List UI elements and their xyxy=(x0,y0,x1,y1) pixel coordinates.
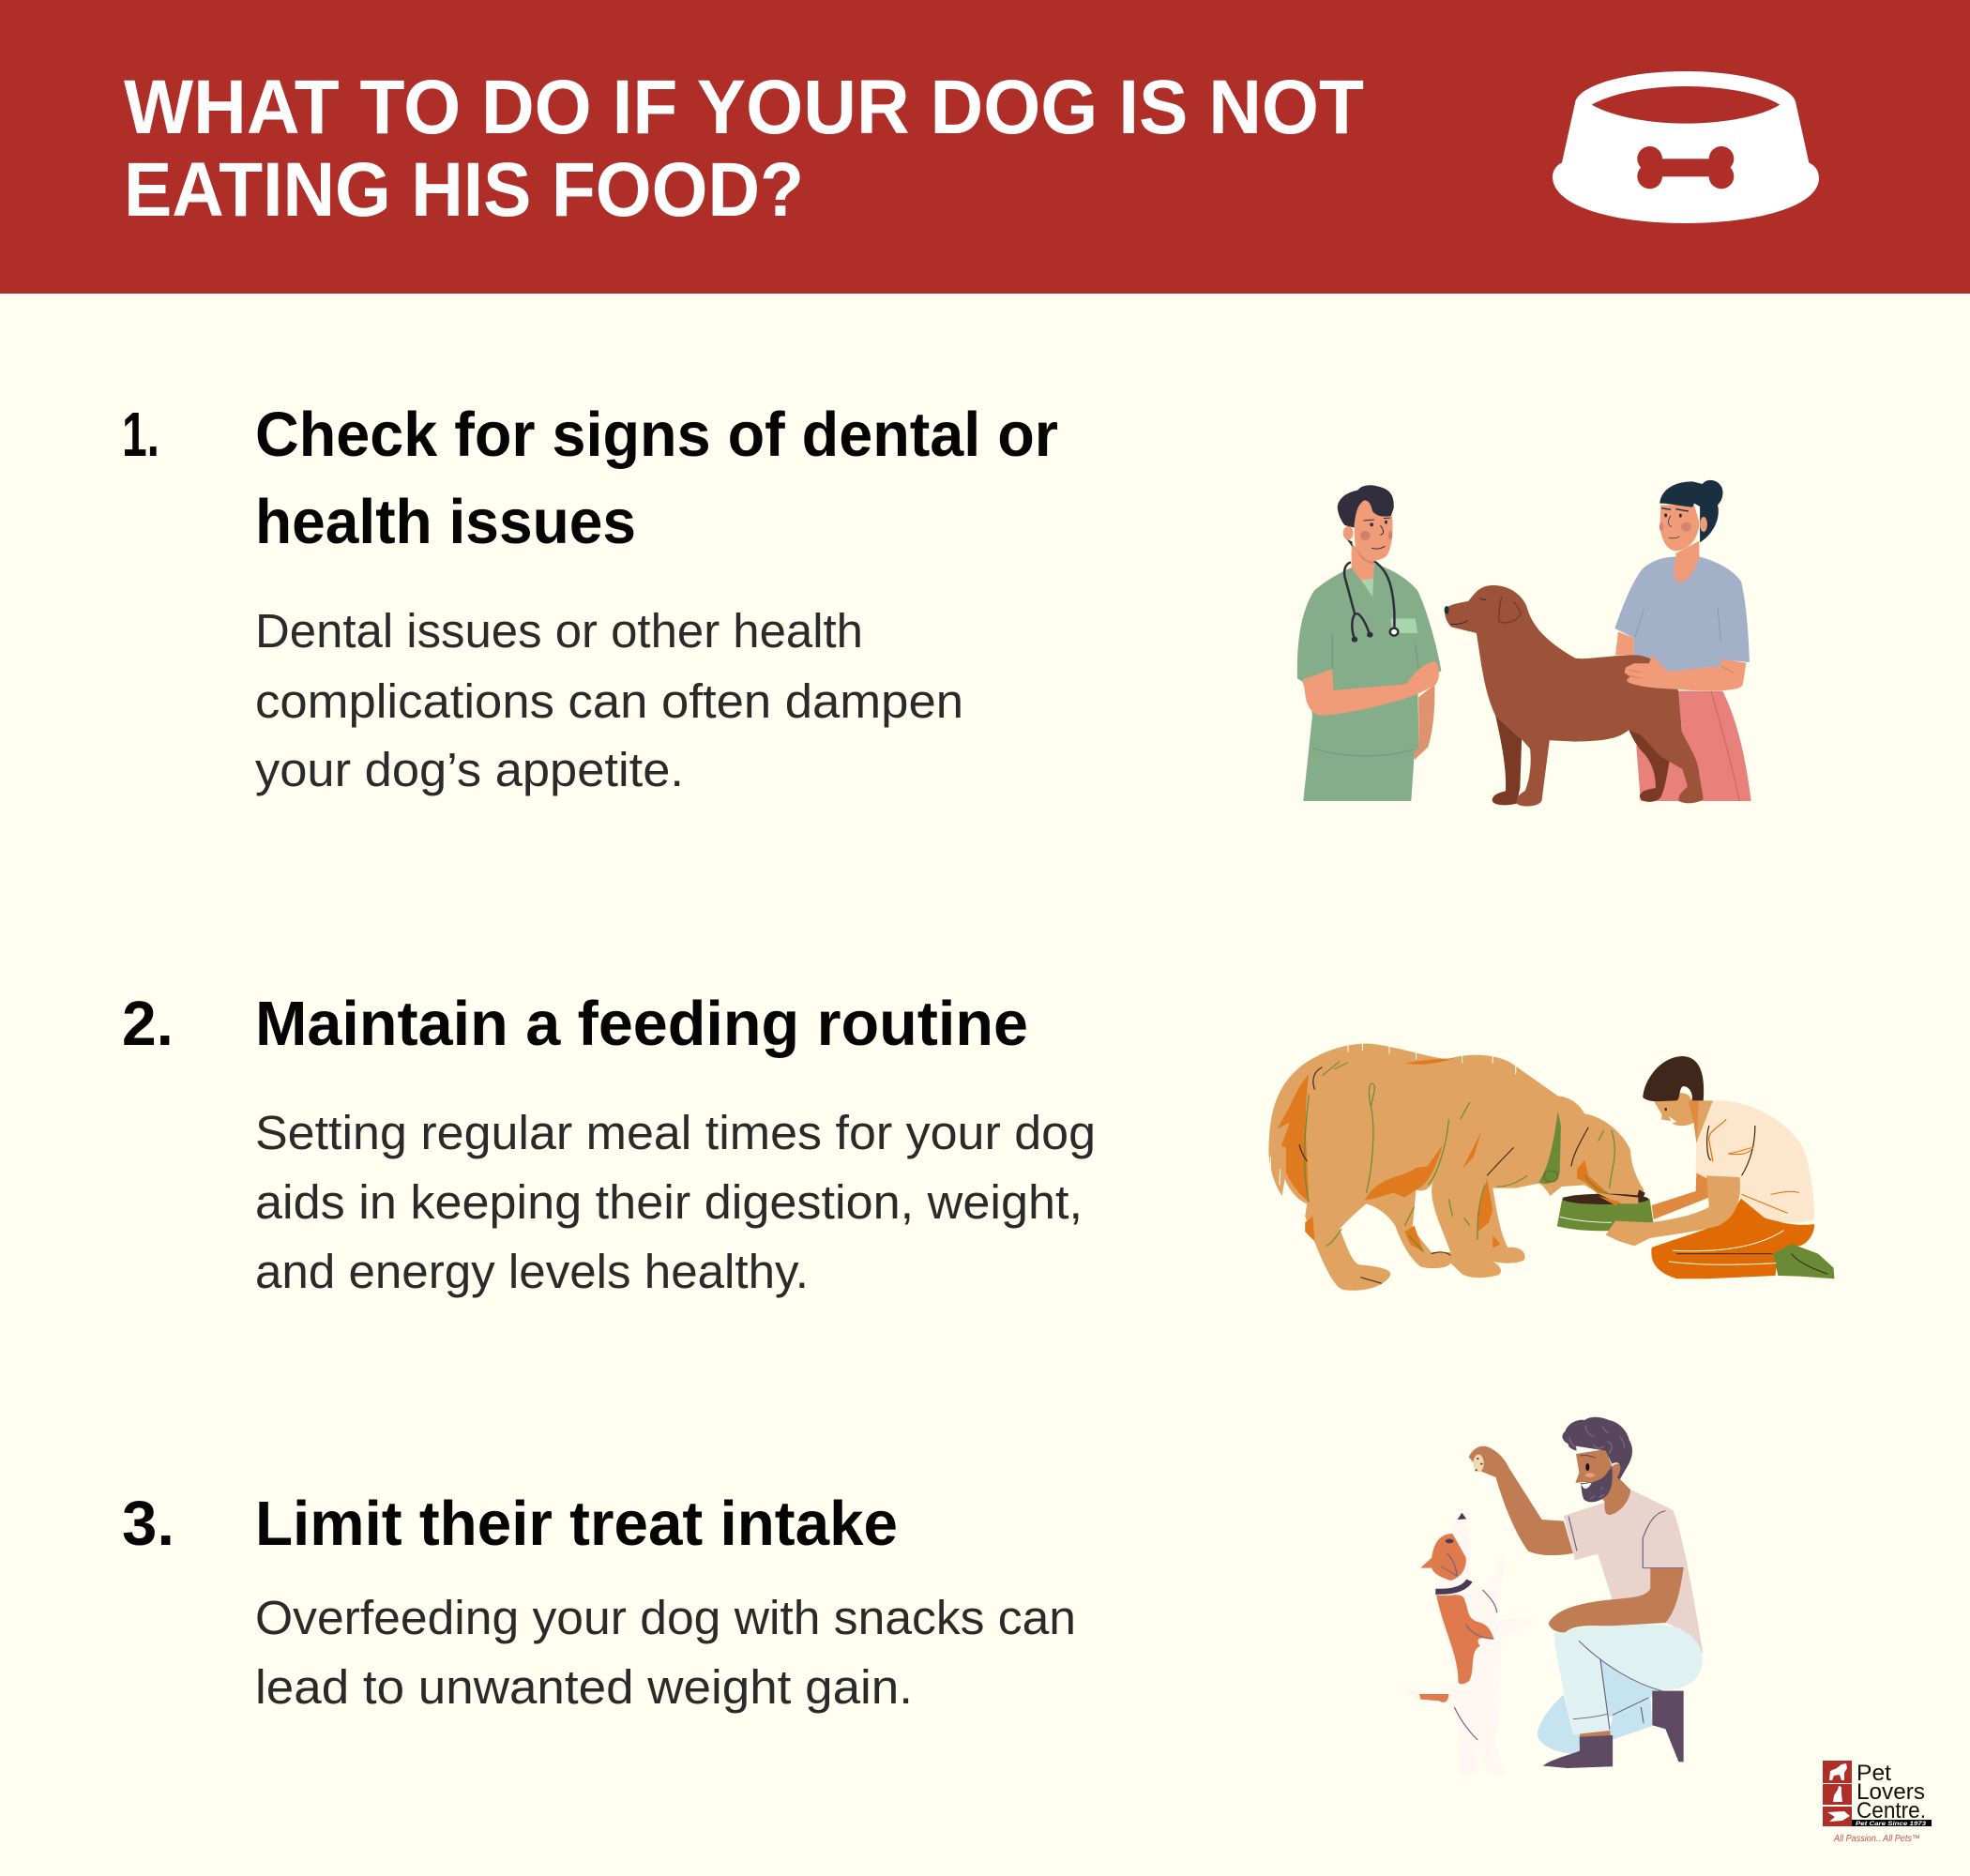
dog xyxy=(1445,585,1704,807)
illustration: man giving treat to dog xyxy=(1402,1417,1704,1775)
logo icon squares xyxy=(1823,1761,1852,1826)
header banner xyxy=(0,0,1970,294)
step 1 body text: Dental issues or other health xyxy=(255,604,863,658)
logo: Pet Lovers Centre xyxy=(1823,1761,1932,1844)
step 3 body text: Overfeeding your dog with snacks can xyxy=(255,1591,1076,1644)
man head with curly hair and beard xyxy=(1562,1417,1632,1515)
jumping dog xyxy=(1402,1513,1534,1775)
step 2 body text: Setting regular meal times for your dog xyxy=(255,1106,1096,1159)
logo wordmark: Centre. xyxy=(1856,1798,1926,1823)
step 3 number: 3. xyxy=(122,1489,174,1559)
step 3 body text: lead to unwanted weight gain. xyxy=(255,1660,913,1714)
step 1 number: 1. xyxy=(122,400,159,470)
boy xyxy=(1606,1056,1834,1278)
food bowl xyxy=(1557,1193,1654,1231)
owner hand xyxy=(1625,655,1746,690)
golden dog xyxy=(1268,1044,1645,1291)
step 2 body text xyxy=(255,1106,1096,1298)
step 3 xyxy=(122,1489,1076,1714)
step 1 heading: Check for signs of dental or xyxy=(255,400,1058,470)
title xyxy=(124,65,1364,233)
step 1 body text: your dog’s appetite. xyxy=(255,743,684,796)
logo wordmark xyxy=(1856,1761,1926,1823)
step 2 xyxy=(122,989,1096,1298)
logo: Pet Lovers Centre: All Passion.. All Pets™ xyxy=(1833,1834,1920,1844)
step 1 body text xyxy=(255,604,963,796)
step 1 xyxy=(122,400,1058,796)
step 2 number: 2. xyxy=(122,989,174,1059)
step 1 body text: complications can often dampen xyxy=(255,674,963,728)
title: WHAT TO DO IF YOUR DOG IS NOT xyxy=(124,65,1364,150)
logo: Pet Lovers Centre: Pet Care Since 1973 xyxy=(1856,1821,1926,1827)
step 2 body text: and energy levels healthy. xyxy=(255,1245,809,1298)
step 3 body text xyxy=(255,1591,1076,1714)
title: EATING HIS FOOD? xyxy=(124,147,804,233)
vet xyxy=(1297,485,1441,801)
logo wordmark: Pet xyxy=(1856,1761,1891,1786)
icon: dog bowl with bone xyxy=(1553,71,1819,223)
step 3 heading: Limit their treat intake xyxy=(255,1489,898,1559)
step 1 heading xyxy=(255,400,1058,557)
man body xyxy=(1469,1446,1704,1768)
owner xyxy=(1614,480,1751,801)
step 2 body text: aids in keeping their digestion, weight, xyxy=(255,1175,1083,1229)
step 1 heading: health issues xyxy=(255,487,636,557)
step 2 heading: Maintain a feeding routine xyxy=(255,989,1028,1059)
illustration: boy feeding golden dog xyxy=(1268,1044,1834,1291)
logo wordmark: Lovers xyxy=(1856,1779,1925,1805)
illustration: vet, dog and owner xyxy=(1297,480,1751,807)
